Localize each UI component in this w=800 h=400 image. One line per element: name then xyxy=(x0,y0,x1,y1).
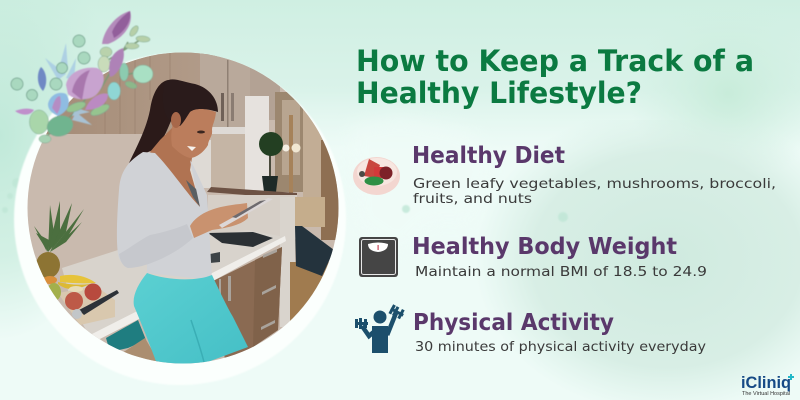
text: body weight details: Maintain a normal BMI of 18.5 to 24.9 xyxy=(415,264,707,280)
text: healthy diet details: fruits, and nuts xyxy=(413,191,532,207)
dark top xyxy=(186,180,200,207)
tablet xyxy=(219,198,273,228)
magnolia blooms xyxy=(102,11,131,44)
logo: iCliniq: iCliniq xyxy=(741,373,791,392)
text: healthy diet details xyxy=(413,176,776,207)
ponytail xyxy=(129,80,171,163)
item: healthy body weight xyxy=(359,232,707,280)
heading: physical activity: Physical Activity xyxy=(413,308,614,336)
wooden drawers xyxy=(213,247,282,360)
eye xyxy=(197,130,205,134)
grey hoodie xyxy=(117,152,212,280)
teal dishwasher and floor xyxy=(106,320,160,364)
icon: person lifting dumbbells xyxy=(355,304,406,353)
white circular ring behind photo xyxy=(14,53,346,385)
heading: healthy body weight: Healthy Body Weight xyxy=(412,232,677,260)
green leaves xyxy=(30,24,153,143)
hoodie sleeve xyxy=(119,224,193,268)
blue petals xyxy=(45,43,92,125)
text: physical activity details: 30 minutes of physical activity everyday xyxy=(415,339,706,355)
turquoise leggings xyxy=(134,273,248,364)
title: Healthy Lifestyle? xyxy=(356,76,642,110)
smile xyxy=(187,146,196,151)
text: healthy diet details: Green leafy vegetables, mushrooms, broccoli, xyxy=(413,176,776,192)
shelf and half wall xyxy=(207,187,329,327)
pineapple xyxy=(34,201,84,278)
kitchen counter xyxy=(62,230,286,342)
ear xyxy=(171,112,181,128)
logo: iCliniq: The Virtual Hospital xyxy=(742,391,790,397)
title: How to Keep a Track of a xyxy=(356,44,754,78)
hands xyxy=(190,203,248,238)
floral decoration xyxy=(11,11,153,143)
neck and chest xyxy=(150,128,201,208)
icon: salad bowl xyxy=(353,157,400,195)
hair xyxy=(163,79,218,126)
photo: woman using a tablet in a kitchen xyxy=(27,52,339,364)
stems xyxy=(40,40,148,140)
dark chair xyxy=(295,226,334,276)
icon: weighing scale xyxy=(359,237,398,277)
title xyxy=(356,44,754,110)
kitchen background xyxy=(27,52,339,364)
item: healthy diet xyxy=(353,141,776,207)
woman xyxy=(117,79,273,364)
face xyxy=(171,108,216,158)
item: physical activity xyxy=(355,304,706,355)
heading: healthy diet: Healthy Diet xyxy=(412,141,565,169)
fruit and cutting board xyxy=(43,275,119,325)
small round buds xyxy=(11,35,90,100)
topiary plant xyxy=(259,132,283,192)
